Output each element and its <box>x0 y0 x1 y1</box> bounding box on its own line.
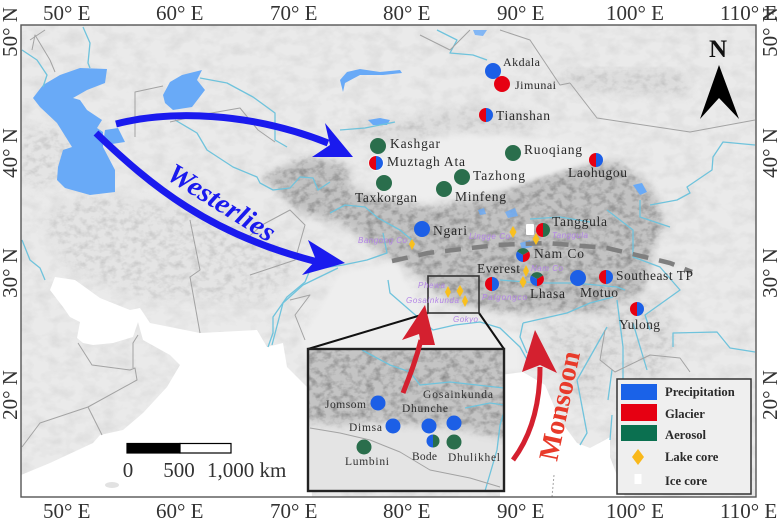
site: Bode <box>412 434 440 463</box>
inset connector lines <box>308 313 504 349</box>
site: Southeast TP: Southeast TP <box>616 268 693 283</box>
site: Minfeng <box>436 181 506 204</box>
site: Tazhong <box>454 168 525 185</box>
site: Jimunai: Jimunai <box>515 78 557 92</box>
legend: glacier: Glacier <box>665 407 705 421</box>
site: Laohugou: Laohugou <box>568 165 627 180</box>
site: Kashgar <box>370 136 440 154</box>
site: Motuo <box>570 270 618 300</box>
top longitude labels: 90° E <box>497 1 544 25</box>
lake core labels: Bangong Co <box>358 236 408 245</box>
bottom longitude labels: 50° E <box>43 499 90 523</box>
site: Jimunai <box>494 76 557 92</box>
site: Tazhong: Tazhong <box>473 168 525 183</box>
inset locator box <box>428 276 479 313</box>
scale bar <box>123 444 286 482</box>
site: Tanggula <box>536 214 607 237</box>
rivers <box>22 27 755 445</box>
site: Kashgar: Kashgar <box>390 136 440 151</box>
site: Tanggula: Tanggula <box>552 214 607 229</box>
site: Laohugou <box>568 153 627 180</box>
top longitude labels: 60° E <box>156 1 203 25</box>
site: Taxkorgan: Taxkorgan <box>355 190 417 205</box>
site: Motuo: Motuo <box>580 285 618 300</box>
inset map <box>300 345 510 491</box>
legend: ice core: Ice core <box>665 474 707 488</box>
site: Jomsom: Jomsom <box>325 399 366 411</box>
lake core labels: Palgongco <box>482 293 528 302</box>
top longitude labels <box>43 1 777 25</box>
bottom longitude labels: 60° E <box>156 499 203 523</box>
Indo-Gangetic plain <box>300 262 520 372</box>
north arrow <box>700 36 739 119</box>
site: Lhasa: Lhasa <box>530 286 565 301</box>
site: Minfeng: Minfeng <box>455 189 506 204</box>
bottom longitude labels: 90° E <box>497 499 544 523</box>
island <box>105 482 119 488</box>
site: Bode: Bode <box>412 451 437 463</box>
lake: Aral Sea <box>163 70 205 110</box>
scale labels: 500 <box>163 458 195 482</box>
site: Akdala <box>485 55 541 79</box>
site: Ngari <box>414 221 467 238</box>
site: Gosainkunda <box>423 389 493 430</box>
site: Yulong: Yulong <box>619 317 660 332</box>
Tarim basin <box>384 136 596 198</box>
ice core marker <box>526 224 534 235</box>
top longitude labels: 80° E <box>383 1 430 25</box>
scale bar black segment <box>127 444 180 453</box>
north label: N <box>709 36 727 63</box>
legend box <box>617 379 751 494</box>
inset background <box>308 349 504 491</box>
scale labels <box>123 458 286 482</box>
site: Dhunche <box>402 403 448 434</box>
lake core markers <box>409 226 540 307</box>
scale labels: 1,000 km <box>207 458 286 482</box>
scale bar white segment <box>180 444 231 453</box>
top longitude labels: 100° E <box>606 1 664 25</box>
top longitude labels: 70° E <box>270 1 317 25</box>
lake: Caspian Sea <box>33 68 115 195</box>
site: Jomsom <box>325 396 386 411</box>
arrow: westerlies upper <box>116 116 353 157</box>
arrow: small monsoon arrow <box>402 305 435 393</box>
top longitude labels: 110° E <box>720 1 777 25</box>
site: Lumbini <box>345 440 389 468</box>
site: Ngari: Ngari <box>433 223 467 238</box>
terrain relief <box>21 70 690 400</box>
lake core labels: Phewa <box>418 281 446 290</box>
lake core labels: Lingge Co <box>469 232 511 241</box>
lake core labels: Tanggula <box>552 231 589 240</box>
Arabian Sea <box>21 277 312 497</box>
site: Lumbini: Lumbini <box>345 456 389 468</box>
site: Ruoqiang: Ruoqiang <box>524 142 582 157</box>
bottom longitude labels <box>43 499 777 523</box>
bottom longitude labels: 80° E <box>383 499 430 523</box>
left latitude labels <box>0 7 22 420</box>
right latitude labels <box>758 7 781 420</box>
lake core labels: Gokyo <box>453 315 479 324</box>
site: Ruoqiang <box>505 142 582 161</box>
label: Westerlies: Westerlies <box>161 158 281 249</box>
lake: Qinghai <box>633 183 647 195</box>
lake core labels: Nam Co <box>531 264 564 273</box>
lake core labels <box>358 231 589 324</box>
site: Gosainkunda: Gosainkunda <box>423 389 493 401</box>
arrow: westerlies lower <box>96 133 345 275</box>
arrow: large monsoon arrow <box>513 330 557 460</box>
site: Nam Co <box>516 246 584 262</box>
site: Yulong <box>619 302 660 332</box>
lake: Issyk-Kul <box>368 118 390 125</box>
site: Dhulikhel: Dhulikhel <box>448 452 500 464</box>
lake: Zaysan and small plateau lakes <box>473 30 532 249</box>
dashed boundary line <box>392 243 692 272</box>
site: Dhunche: Dhunche <box>402 403 448 415</box>
legend: precipitation: Precipitation <box>665 385 735 399</box>
site: Lhasa <box>530 272 565 301</box>
lake core labels: Gosainkunda <box>406 296 460 305</box>
site: Everest: Everest <box>477 261 520 276</box>
bottom longitude labels: 100° E <box>606 499 664 523</box>
north arrow glyph <box>700 65 739 119</box>
site: Dimsa <box>349 418 400 434</box>
bottom longitude labels: 110° E <box>720 499 777 523</box>
site: Nam Co: Nam Co <box>534 246 584 261</box>
Bay of Bengal <box>500 372 625 497</box>
inset border <box>308 349 504 491</box>
bottom longitude labels: 70° E <box>270 499 317 523</box>
site: Taxkorgan <box>355 175 417 205</box>
inset relief <box>309 350 503 490</box>
label: Monsoon: Monsoon <box>534 348 587 463</box>
legend: lake core: Lake core <box>665 450 719 464</box>
legend: aerosol: Aerosol <box>665 428 707 442</box>
site: Akdala: Akdala <box>503 55 541 69</box>
top longitude labels: 50° E <box>43 1 90 25</box>
site: Dhulikhel <box>446 434 500 464</box>
site: Muztagh Ata: Muztagh Ata <box>387 154 465 169</box>
site: Dimsa: Dimsa <box>349 422 382 434</box>
lake: Kara-Bogaz <box>104 128 125 144</box>
lake: Balkhash <box>340 69 402 92</box>
legend <box>617 379 751 494</box>
site: Tianshan: Tianshan <box>496 108 550 123</box>
site: Everest <box>477 261 520 291</box>
scale labels: 0 <box>123 458 133 482</box>
